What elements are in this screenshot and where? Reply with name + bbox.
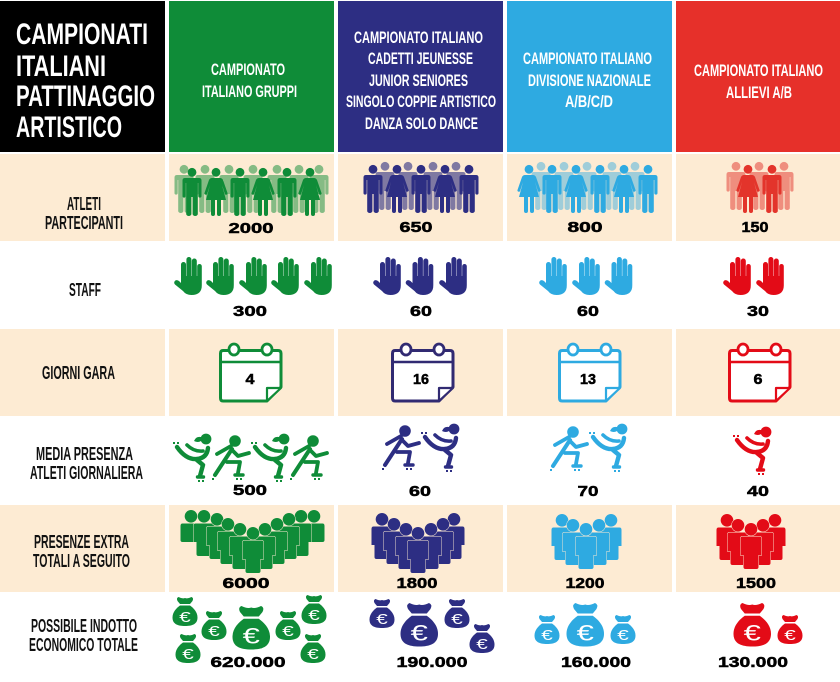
cell: presenze divisione 1200: 1200 — [566, 576, 604, 592]
header: cadetti jeunesse junior seniores: JUNIOR SENIORES — [369, 71, 468, 90]
cell: staff gruppi 300: 300 — [233, 304, 267, 320]
row label: giorni gara — [0, 329, 165, 416]
cell: giorni allievi 6: 6 — [754, 372, 762, 388]
cell: giorni cadetti 16: 16 — [413, 372, 429, 388]
cell: presenze allievi 1500: 1500 — [736, 576, 776, 592]
cell: staff gruppi 300 — [174, 257, 332, 320]
header: campionato italiano gruppi: ITALIANO GRUPPI — [202, 82, 297, 101]
cell: indotto gruppi 620.000: € — [182, 646, 195, 663]
cell: indotto gruppi 620.000: € — [307, 646, 320, 663]
row label: presenze extra totali a seguito — [0, 505, 165, 592]
cell: media gruppi 500: 500 — [233, 483, 267, 499]
cell: staff cadetti 60: 60 — [410, 304, 432, 320]
header: cadetti jeunesse junior seniores: DANZA SOLO DANCE — [365, 114, 478, 133]
cell: indotto allievi 130.000 — [718, 603, 802, 671]
cell: atleti allievi 150: 150 — [742, 220, 768, 236]
row label: media presenza atleti giornaliera — [30, 444, 143, 483]
cell: presenze divisione 1200 — [507, 505, 672, 592]
cell: presenze gruppi 6000 — [169, 505, 334, 592]
cell: giorni gruppi 4 — [169, 329, 334, 416]
cell: indotto divisione 160.000: € — [617, 627, 630, 644]
cell: atleti gruppi 2000: 2000 — [228, 221, 274, 237]
cell: indotto allievi 130.000: 130.000 — [718, 655, 788, 671]
cell: media allievi 40: 40 — [747, 484, 769, 500]
header: cadetti jeunesse junior seniores: SINGOLO COPPIE ARTISTICO — [346, 92, 496, 111]
cell: indotto gruppi 620.000: € — [208, 623, 221, 640]
cell: media divisione 70 — [550, 424, 627, 500]
cell: indotto gruppi 620.000: € — [282, 623, 295, 640]
cell: indotto cadetti 190.000: € — [376, 611, 389, 628]
cell: indotto divisione 160.000: € — [541, 627, 554, 644]
cell: presenze cadetti 1800 — [338, 505, 503, 592]
cell: presenze cadetti 1800: 1800 — [396, 576, 438, 592]
header: allievi — [676, 1, 840, 152]
cell: indotto cadetti 190.000: € — [476, 636, 489, 653]
row label: presenze extra totali a seguito: PRESENZE EXTRA — [34, 532, 129, 552]
header: title: ARTISTICO — [16, 111, 122, 144]
cell: indotto gruppi 620.000: € — [243, 624, 261, 649]
header: divisione nazionale — [507, 1, 672, 152]
header: campionato italiano gruppi: CAMPIONATO — [211, 60, 285, 79]
cell: indotto cadetti 190.000 — [370, 599, 494, 671]
cell: atleti allievi 150 — [676, 154, 840, 241]
cell: media gruppi 500 — [173, 434, 327, 499]
row label: atleti partecipanti: PARTECIPANTI — [45, 213, 123, 233]
cell: giorni allievi 6 — [676, 329, 840, 416]
cell: giorni divisione 13 — [507, 329, 672, 416]
row label: atleti partecipanti — [0, 154, 165, 241]
cell: giorni cadetti 16 — [338, 329, 503, 416]
cell: staff divisione 60: 60 — [577, 304, 599, 320]
cell: indotto divisione 160.000: € — [577, 621, 595, 646]
header: title: PATTINAGGIO — [16, 80, 155, 113]
cell: atleti divisione 800 — [507, 154, 672, 241]
row label: staff: STAFF — [69, 280, 101, 300]
cell: indotto cadetti 190.000: 190.000 — [396, 655, 468, 671]
row label: possibile indotto economico totale: POSSIBILE INDOTTO — [31, 616, 137, 636]
row label: media presenza atleti giornaliera: ATLETI GIORNALIERA — [30, 463, 143, 483]
row label: possibile indotto economico totale — [29, 616, 138, 655]
row label: giorni gara: GIORNI GARA — [42, 363, 115, 383]
header: divisione nazionale: CAMPIONATO ITALIANO — [523, 49, 652, 68]
cell: indotto allievi 130.000: € — [784, 627, 797, 644]
row label: presenze extra totali a seguito: TOTALI A SEGUITO — [33, 551, 130, 571]
header: cadetti jeunesse junior seniores: CADETTI JEUNESSE — [368, 49, 473, 68]
header: campionato italiano gruppi — [169, 1, 334, 152]
header: divisione nazionale: DIVISIONE NAZIONALE — [528, 71, 651, 90]
cell: atleti gruppi 2000 — [169, 154, 334, 241]
cell: indotto cadetti 190.000: € — [411, 621, 429, 646]
cell: presenze gruppi 6000: 6000 — [222, 576, 270, 592]
cell: staff allievi 30: 30 — [747, 304, 769, 320]
cell: indotto gruppi 620.000: € — [179, 609, 192, 626]
cell: indotto gruppi 620.000 — [172, 595, 326, 671]
cell: indotto cadetti 190.000: € — [451, 611, 464, 628]
cell: giorni divisione 13: 13 — [580, 372, 596, 388]
header: cadetti jeunesse junior seniores: CAMPIONATO ITALIANO — [354, 28, 483, 47]
cell: media divisione 70: 70 — [578, 484, 598, 500]
cell: staff divisione 60 — [539, 257, 632, 320]
cell: indotto divisione 160.000: 160.000 — [561, 655, 631, 671]
cell: presenze allievi 1500 — [676, 505, 840, 592]
cell: staff allievi 30 — [723, 257, 784, 320]
row label: media presenza atleti giornaliera: MEDIA PRESENZA — [36, 444, 133, 464]
cell: media cadetti 60: 60 — [409, 484, 431, 500]
header: divisione nazionale: A/B/C/D — [565, 92, 613, 111]
cell: media allievi 40 — [733, 427, 771, 500]
cell: staff cadetti 60 — [373, 257, 467, 320]
header: title: ITALIANI — [16, 50, 106, 83]
cell: atleti cadetti 650 — [338, 154, 503, 241]
cell: indotto divisione 160.000 — [534, 603, 636, 671]
cell: indotto allievi 130.000: € — [744, 621, 762, 646]
cell: giorni gruppi 4: 4 — [246, 372, 254, 388]
cell: atleti divisione 800: 800 — [568, 220, 602, 236]
row label: possibile indotto economico totale: ECONOMICO TOTALE — [29, 635, 138, 655]
cell: indotto gruppi 620.000: 620.000 — [210, 655, 286, 671]
header: allievi: ALLIEVI A/B — [726, 83, 792, 102]
row label: atleti partecipanti: ATLETI — [67, 194, 101, 214]
header: title: CAMPIONATI — [16, 18, 148, 51]
cell: indotto gruppi 620.000: € — [308, 607, 321, 624]
cell: atleti cadetti 650: 650 — [400, 220, 432, 236]
header: cadetti jeunesse junior seniores — [338, 1, 503, 152]
header: title — [0, 1, 165, 152]
cell: media cadetti 60 — [382, 424, 459, 500]
